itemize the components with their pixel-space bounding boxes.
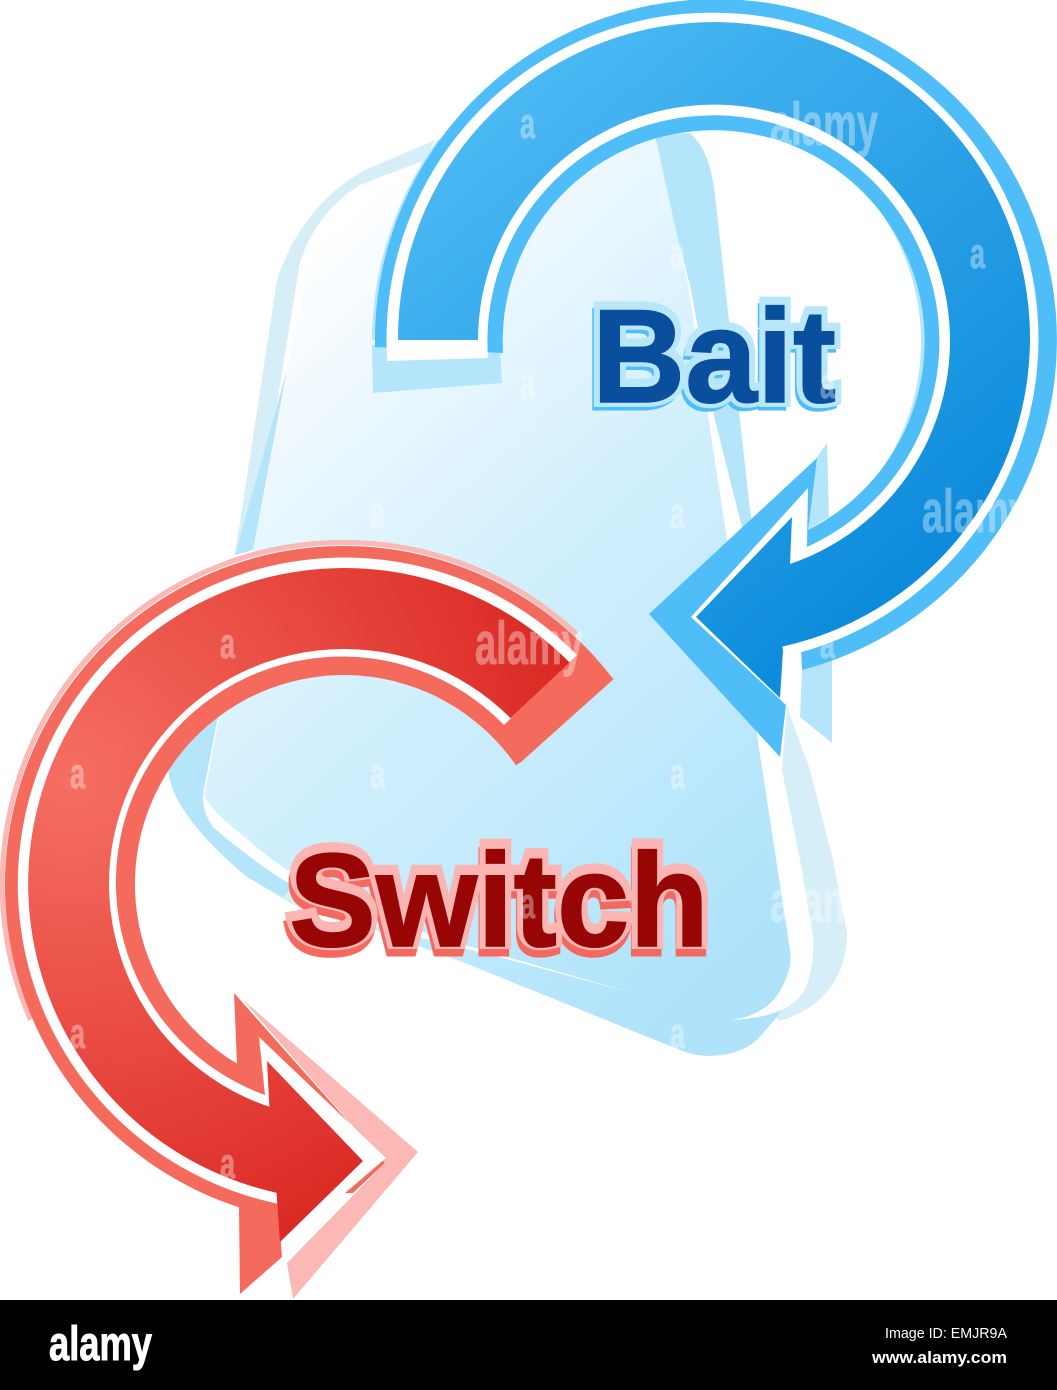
label: Bait: Bait <box>592 283 836 431</box>
footer logo: alamy: alamy <box>49 1318 152 1371</box>
arrow: red circular arrow <box>2 542 616 1299</box>
watermarks: alamy: a <box>220 620 236 668</box>
watermarks: alamy: alamy <box>475 610 583 677</box>
white highlight: lower left edge <box>203 793 640 995</box>
footer image id: Image ID: EMJR9A <box>885 1325 1007 1342</box>
watermarks: alamy: a <box>70 1010 86 1058</box>
label: Bait: Bait <box>589 286 833 434</box>
watermarks: alamy <box>70 91 1030 1188</box>
watermarks: alamy: a <box>220 1140 236 1188</box>
footer bar <box>0 1300 1057 1390</box>
panel: glossy background shape <box>150 133 847 1056</box>
watermarks: alamy: a <box>820 620 836 668</box>
watermarks: alamy: alamy <box>770 868 878 935</box>
label: Switch: Switch <box>289 827 709 975</box>
label: Bait: Bait <box>592 281 836 429</box>
watermarks: alamy: a <box>970 230 986 278</box>
white highlight: left edge <box>204 720 218 793</box>
watermarks: alamy: a <box>520 360 536 408</box>
watermarks: alamy: a <box>670 230 686 278</box>
watermarks: alamy: a <box>70 750 86 798</box>
footer url: www.alamy.com <box>871 1348 1007 1367</box>
watermarks: alamy: a <box>370 750 386 798</box>
watermarks: alamy: a <box>520 100 536 148</box>
watermarks: alamy: alamy <box>770 91 878 158</box>
label: Switch: Switch <box>287 831 708 979</box>
label: Switch: Switch <box>289 823 709 971</box>
watermarks: alamy: a <box>370 490 386 538</box>
white highlight: lower right edge <box>730 860 813 1020</box>
watermarks: alamy: a <box>670 490 686 538</box>
watermarks: alamy: a <box>820 360 836 408</box>
arrow: blue circular arrow <box>372 0 1057 757</box>
watermarks: alamy: a <box>670 1010 686 1058</box>
watermarks: alamy: a <box>670 750 686 798</box>
watermarks: alamy: a <box>520 880 536 928</box>
